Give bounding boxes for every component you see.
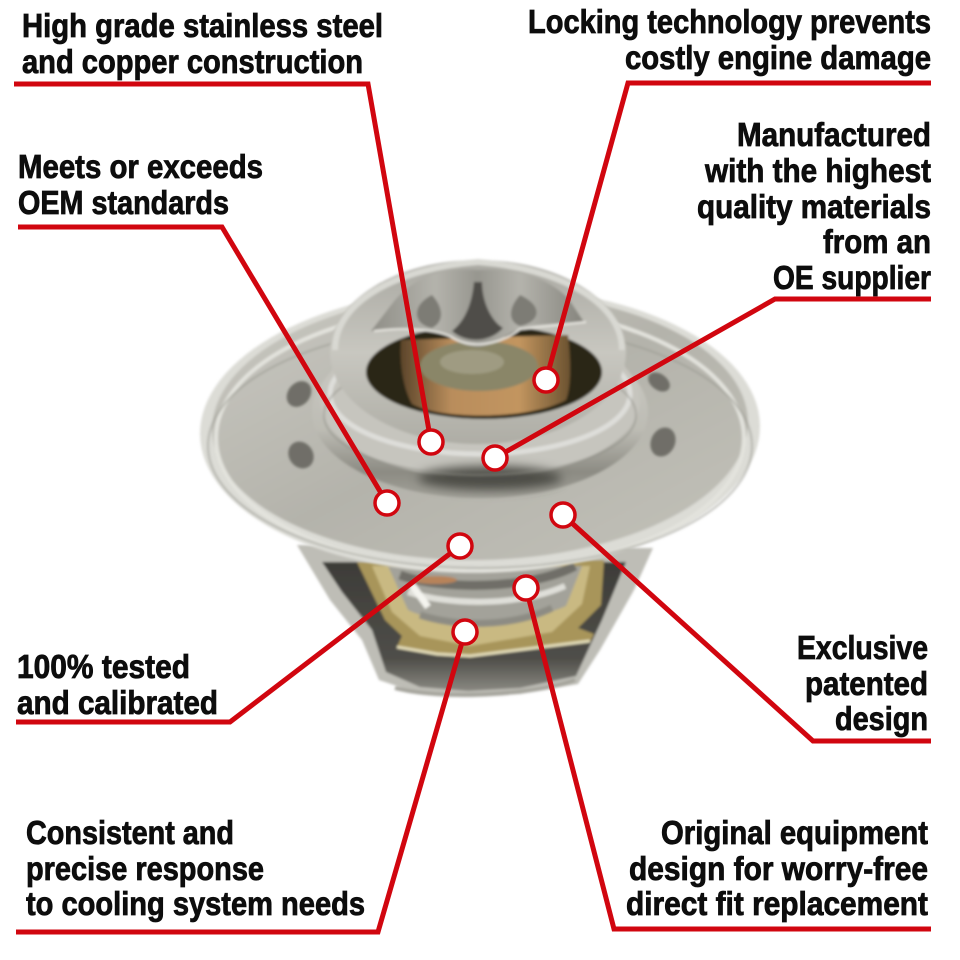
- label: Meets or exceeds: Meets or exceeds: [18, 148, 263, 185]
- leader line: Meets or exceeds: [18, 227, 387, 503]
- leader line: 100% tested: [16, 546, 460, 722]
- label: Locking technology: [528, 3, 931, 76]
- label: Original equipment: [626, 814, 928, 922]
- leader line: Locking technology: [546, 83, 931, 380]
- label: Exclusive: Exclusive: [797, 629, 928, 666]
- label: 100% tested: [17, 648, 218, 721]
- label: Exclusive: [797, 629, 928, 737]
- flange holes: [282, 369, 680, 473]
- label: Exclusive: design: [835, 700, 928, 737]
- leader line: High grade stainless steel: [14, 84, 431, 442]
- label: Manufactured: Manufactured: [737, 116, 931, 153]
- label: High grade stainless steel: and copper construction: [22, 43, 363, 80]
- label: Original equipment: Original equipment: [661, 814, 928, 851]
- label: Manufactured: [697, 116, 931, 296]
- label: Consistent: precise response: [26, 850, 264, 887]
- callout markers: [375, 368, 575, 644]
- label: Original equipment: design for worry-free: [629, 850, 928, 887]
- label: Manufactured: quality materials: [697, 188, 931, 225]
- label: Locking technology: costly engine damage: [625, 39, 931, 76]
- leader line: Consistent: [16, 632, 465, 932]
- raised ring: [312, 322, 648, 498]
- label: 100% tested: 100% tested: [17, 648, 190, 685]
- label: Exclusive: patented: [805, 665, 928, 702]
- label: High grade stainless steel: [22, 7, 383, 80]
- label: Meets or exceeds: [18, 148, 263, 221]
- leader line: Manufactured: [495, 299, 931, 458]
- lower body: [297, 545, 653, 697]
- leader line: Exclusive: [563, 515, 931, 741]
- label: Manufactured: from an: [823, 223, 931, 260]
- label: High grade stainless steel: High grade stainless steel: [22, 7, 383, 44]
- label: Meets or exceeds: OEM standards: [18, 184, 229, 221]
- leader line: Original equipment: [526, 588, 931, 929]
- label: Manufactured: with the highest: [704, 152, 931, 189]
- thermostat photo: [198, 260, 762, 697]
- dome and brass core: [330, 260, 626, 444]
- label: Original equipment: direct fit replacement: [626, 885, 928, 922]
- label: Manufactured: OE supplier: [773, 259, 931, 296]
- label: 100% tested: and calibrated: [17, 684, 218, 721]
- flange: [198, 282, 762, 578]
- label: Consistent: Consistent and: [26, 814, 234, 851]
- label: Consistent: to cooling system needs: [26, 885, 365, 922]
- label: Consistent: [26, 814, 365, 922]
